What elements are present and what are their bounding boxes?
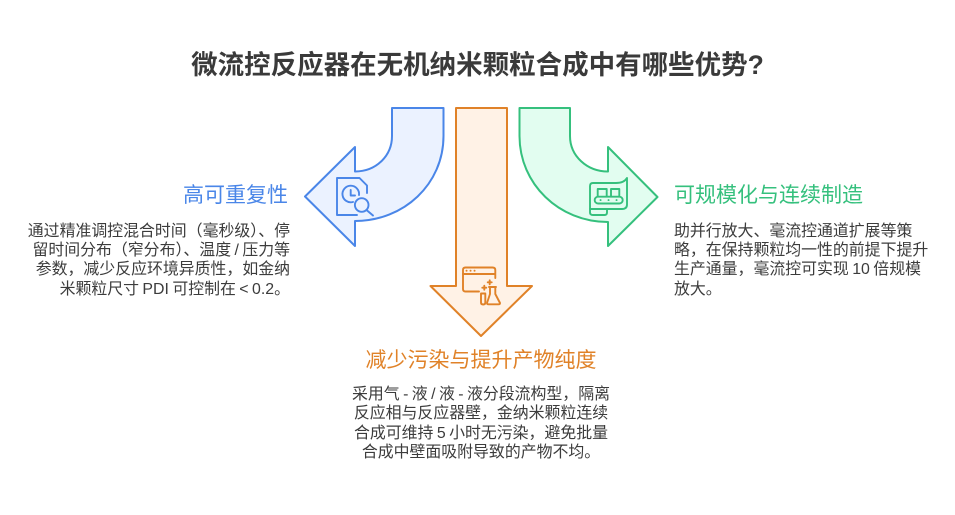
arrow: blue left [305, 108, 444, 246]
arrow: green right [520, 108, 658, 246]
heading: scalable continuous manufacturing: 可规模化与连续制造 [674, 184, 863, 206]
text: high repeatability: 留时间分布（窄分布）、温度 / 压力等 [32, 242, 290, 259]
text: high repeatability: 通过精准调控混合时间（毫秒级）、停 [28, 222, 290, 240]
text: reduce contamination and improve purity: 反应相与反应器壁，金纳米颗粒连续 [354, 405, 608, 422]
arrow: orange down [430, 108, 532, 336]
text: high repeatability: 参数，减少反应环境异质性，如金纳 [36, 261, 290, 278]
title: 微流控反应器在无机纳米颗粒合成中有哪些优势? [191, 50, 764, 80]
text: reduce contamination and improve purity: 采用气 - 液 / 液 - 液分段流构型，隔离 [352, 386, 610, 403]
text: reduce contamination and improve purity: 合成中壁面吸附导致的产物不均。 [362, 444, 600, 461]
text: scalable continuous manufacturing [674, 222, 928, 298]
text: scalable continuous manufacturing: 生产通量，毫流控可实现 10 倍规模 [674, 261, 921, 278]
text: high repeatability [28, 222, 290, 298]
icon: document clock search [337, 178, 373, 216]
heading: high repeatability: 高可重复性 [183, 184, 288, 206]
icon: conveyor factory [590, 178, 627, 215]
heading: reduce contamination and improve purity: 减少污染与提升产物纯度 [366, 349, 596, 372]
text: scalable continuous manufacturing: 放大。 [674, 281, 722, 298]
icon: browser flask [463, 268, 500, 304]
text: high repeatability: 米颗粒尺寸 PDI 可控制在 < 0.2。 [60, 281, 290, 298]
text: scalable continuous manufacturing: 略，在保持颗粒均一性的前提下提升 [674, 242, 928, 259]
text: reduce contamination and improve purity [352, 385, 610, 461]
text: reduce contamination and improve purity: 合成可维持 5 小时无污染，避免批量 [354, 425, 608, 442]
text: scalable continuous manufacturing: 助并行放大、毫流控通道扩展等策 [674, 222, 912, 240]
